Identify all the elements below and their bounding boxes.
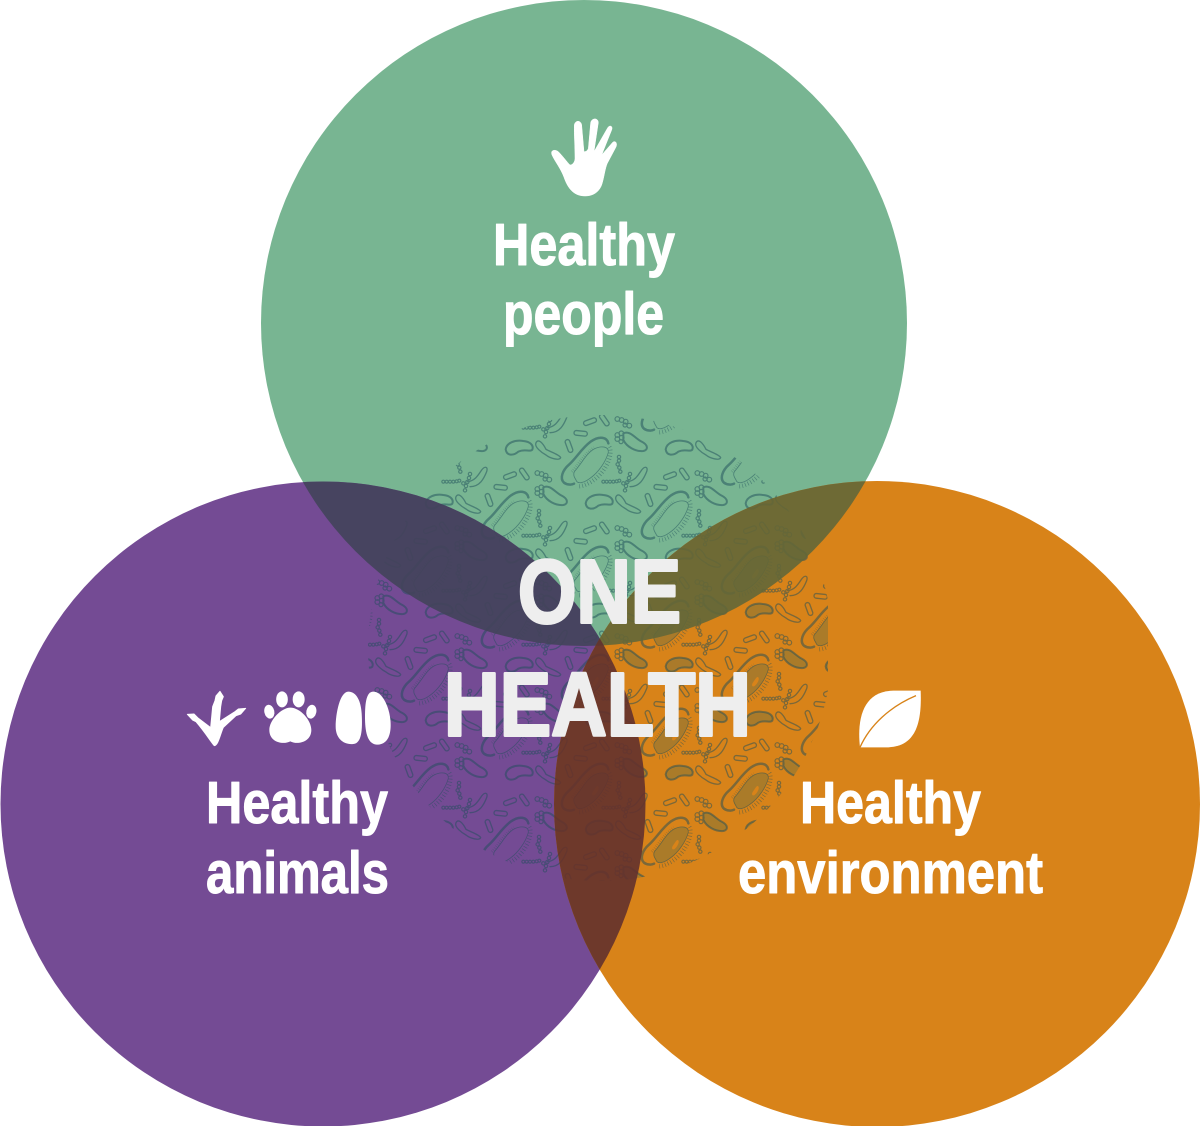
heading: Healthy people: Healthy	[493, 212, 675, 278]
icon: bird foot	[187, 691, 246, 746]
icon: hoof	[336, 692, 391, 745]
overlap: animals and environment	[554, 638, 646, 970]
heading: Healthy animals: Healthy	[206, 770, 388, 836]
heading: Healthy animals	[206, 770, 389, 906]
circle: healthy people (green)	[261, 0, 907, 646]
title: ONE HEALTH: ONE	[518, 542, 681, 642]
bacteria fills on orange	[554, 556, 828, 878]
circle: healthy environment (orange)	[554, 481, 1200, 1126]
icon: leaf	[859, 691, 921, 747]
heading: Healthy environment: environment	[738, 840, 1043, 906]
icons: bird foot, paw, hoof	[187, 691, 391, 746]
heading: Healthy animals: animals	[206, 840, 389, 906]
icon: paw	[263, 691, 318, 743]
heading: Healthy people	[493, 212, 675, 347]
heading: Healthy environment	[738, 770, 1043, 906]
icon: hand	[552, 119, 617, 196]
heading: Healthy people: people	[503, 281, 664, 347]
overlap: people and environment	[596, 481, 866, 646]
title: ONE HEALTH	[444, 542, 751, 756]
heading: Healthy environment: Healthy	[800, 770, 981, 836]
bacteria pattern	[368, 415, 828, 881]
overlap: people and animals	[303, 482, 604, 646]
title: ONE HEALTH: HEALTH	[444, 656, 751, 756]
circle: healthy animals (purple)	[0, 482, 646, 1126]
